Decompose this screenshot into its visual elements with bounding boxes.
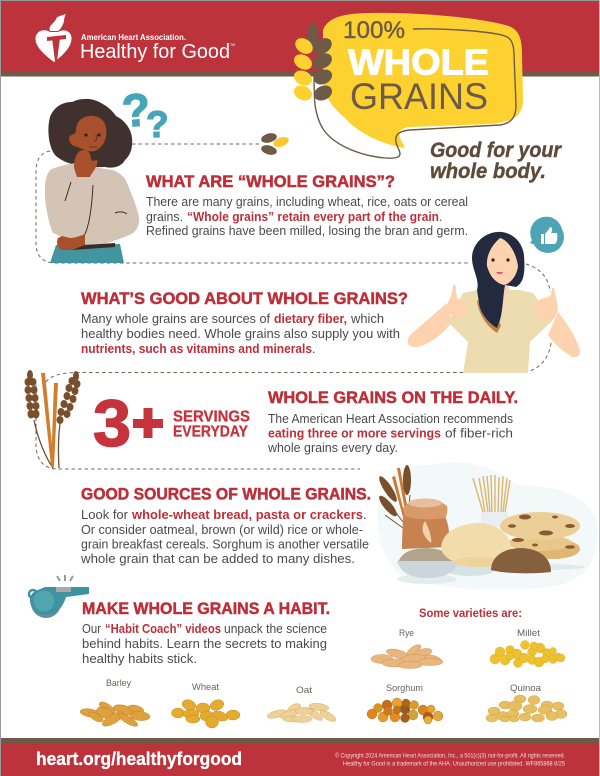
dashed connector lines: [36, 144, 551, 469]
text block: make a habit: healthy habits stick.: [82, 652, 197, 666]
heading: some varieties: Some varieties are:: [419, 608, 522, 620]
text block: make a habit: “Habit Coach” videos: [105, 622, 221, 636]
grain: sorghum: Sorghum: [386, 683, 423, 694]
text block: good sources: Or consider oatmeal, brown (or wild) rice or whole-: [81, 523, 363, 537]
text block: good sources: whole grain that can be added to many dishes.: [80, 552, 355, 566]
icon: whistle: [29, 575, 89, 618]
text block: on the daily: of fiber-rich: [445, 426, 513, 440]
logo: American Heart Association Healthy for Good: American Heart Association.: [81, 33, 186, 42]
text block: what are whole grains: Refined grains have been milled, losing the bran and germ.: [146, 224, 468, 238]
icon: question marks: [120, 83, 169, 145]
text block: on the daily: The American Heart Association recommends: [268, 412, 513, 426]
heading: make a habit: MAKE WHOLE GRAINS A HABIT.: [82, 599, 330, 618]
text block: what are whole grains: “Whole grains” retain every part of the grain: [187, 210, 439, 224]
icon: question marks: ?: [120, 83, 152, 137]
logo: American Heart Association Healthy for Good: TM: [230, 43, 235, 47]
logo: American Heart Association Healthy for Good: [35, 14, 235, 63]
heading: on the daily: WHOLE GRAINS ON THE DAILY.: [268, 388, 518, 407]
text block: what's good: dietary fiber,: [274, 312, 347, 326]
speech bubble title: 100% whole grains: WHOLE: [348, 42, 489, 82]
speech bubble title: 100% whole grains: 100%: [343, 17, 405, 44]
text block: what's good: .: [312, 342, 315, 356]
text block: make a habit: [82, 622, 327, 666]
text block: make a habit: unpack the science: [224, 622, 327, 636]
grain: sorghum: [367, 683, 443, 724]
footer band: [1, 738, 599, 776]
wheat icon: [291, 23, 335, 103]
grain: rye: [371, 628, 443, 668]
heading: good sources: GOOD SOURCES OF WHOLE GRAINS.: [81, 484, 371, 504]
text block: what's good: [81, 312, 400, 356]
speech bubble title: 100% whole grains: [291, 13, 523, 158]
speech bubble title: 100% whole grains: GRAINS: [350, 75, 488, 117]
text block: good sources: .: [363, 508, 366, 522]
heading: what's good: WHAT’S GOOD ABOUT WHOLE GRAINS?: [81, 289, 408, 308]
heading: what are whole grains: WHAT ARE “WHOLE GRAINS”?: [146, 172, 395, 191]
grain: rye: Rye: [399, 628, 414, 639]
tagline: [430, 139, 563, 183]
text block: on the daily: [267, 412, 513, 455]
text block: on the daily: eating three or more servings: [268, 426, 441, 440]
text block: make a habit: behind habits. Learn the secrets to making: [82, 637, 327, 651]
icon: grain seeds: [260, 132, 290, 156]
text block: what are whole grains: [146, 195, 468, 238]
text block: good sources: grain breakfast cereals. Sorghum is another versatile: [81, 538, 369, 552]
text block: what are whole grains: grains.: [146, 210, 183, 224]
icon: question marks: ?: [146, 104, 169, 145]
text block: what's good: nutrients, such as vitamins and minerals: [81, 342, 312, 356]
grain: barley: [79, 678, 150, 729]
copyright: © Copyright 2024 American Heart Association, Inc., a 501(c)(3) not-for-profit. All rights reserved.: [335, 752, 565, 760]
text block: what's good: which: [350, 312, 384, 326]
text block: good sources: Look for: [81, 508, 128, 522]
grain: wheat: Wheat: [192, 682, 219, 693]
logo: American Heart Association Healthy for Good: Healthy for Good: [80, 40, 230, 63]
grain: oat: [266, 685, 338, 724]
icon: wheat stalks: [24, 370, 80, 468]
tagline: whole body.: [430, 160, 546, 183]
text block: what's good: Many whole grains are sources of: [81, 312, 271, 326]
text block: make a habit: Our: [82, 622, 101, 636]
grain: quinoa: Quinoa: [510, 683, 542, 694]
text block: good sources: [80, 508, 369, 566]
illustration: thinking woman: [45, 99, 139, 263]
grain: quinoa: [486, 683, 567, 722]
grain: barley: Barley: [106, 678, 131, 689]
header band: [1, 1, 599, 76]
footer url: heart.org/healthyforgood: [36, 749, 242, 769]
illustration: woman with thumbs up: [408, 232, 580, 373]
copyright: [335, 752, 566, 768]
grain: wheat: [172, 682, 240, 728]
callout: 3+ servings everyday: EVERYDAY: [173, 424, 248, 440]
copyright: Healthy for Good is a trademark of the AHA. Unauthorized use prohibited. WF865868 8/25: [343, 762, 566, 768]
grain: millet: [490, 628, 565, 668]
grain: oat: Oat: [296, 685, 312, 696]
text block: on the daily: whole grains every day.: [267, 441, 398, 455]
text block: good sources: whole-wheat bread, pasta or crackers: [131, 508, 363, 522]
tagline: Good for your: [430, 139, 563, 162]
icon: thumbs up bubble: [530, 217, 564, 253]
callout: 3+ servings everyday: SERVINGS: [173, 408, 250, 426]
grain: millet: Millet: [517, 628, 540, 639]
callout: 3+ servings everyday: [93, 386, 250, 460]
illustration: grain foods: [376, 462, 597, 590]
text block: what are whole grains: .: [439, 210, 442, 224]
callout: 3+ servings everyday: 3: [93, 386, 131, 460]
text block: what's good: healthy bodies need. Whole grains also supply you with: [81, 327, 400, 341]
text block: what are whole grains: There are many grains, including wheat, rice, oats or cereal: [146, 195, 468, 209]
